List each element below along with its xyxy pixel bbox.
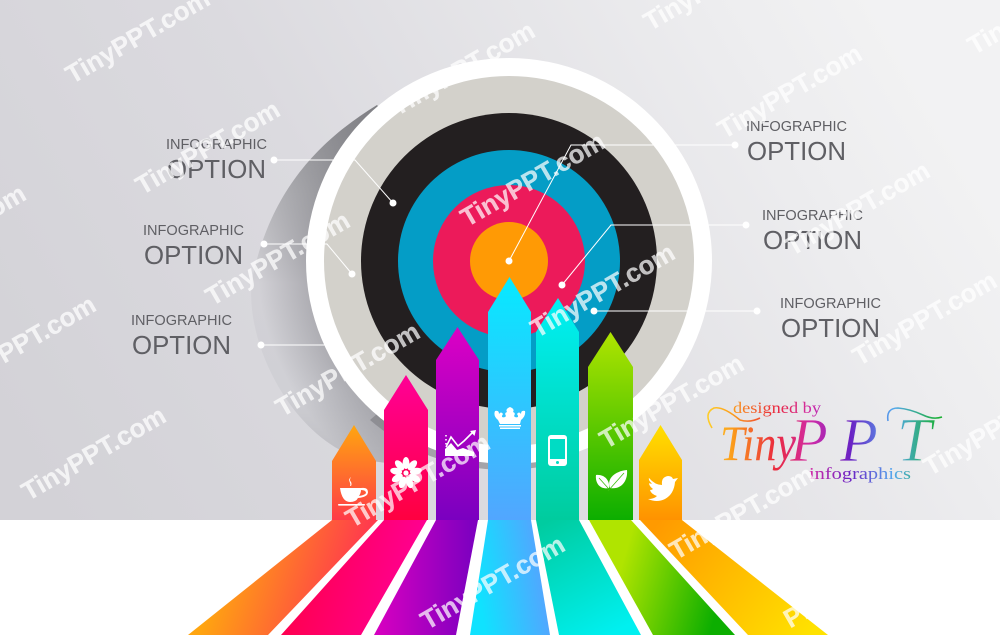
icon: crown — [494, 407, 525, 429]
icon: leaves — [596, 470, 627, 491]
watermarks: TinyPPT.com — [16, 400, 171, 507]
watermarks: TinyPPT.com — [594, 348, 749, 455]
option label middle right: INFOGRAPHIC — [762, 207, 863, 224]
watermarks: TinyPPT.com — [385, 15, 540, 122]
icon: coffee cup — [338, 477, 368, 506]
floor strips — [188, 520, 828, 635]
arrow 7 yellow with bird icon — [639, 425, 682, 520]
icon: flower — [390, 457, 422, 489]
option label middle left — [143, 222, 244, 270]
watermarks: TinyPPT.com — [455, 126, 610, 233]
target: concentric circles — [306, 58, 712, 464]
watermarks: TinyPPT.com — [664, 459, 819, 566]
watermarks: PPT — [778, 583, 837, 634]
watermarks: TinyPPT.com — [712, 38, 867, 145]
watermarks: TinyPPT.com — [130, 94, 285, 201]
option label top left: OPTION — [167, 154, 266, 184]
icon: line chart — [445, 430, 476, 456]
option label bottom left: OPTION — [132, 330, 231, 360]
option label middle right: OPTION — [763, 225, 862, 255]
brand logo: designed by TinyPPT infographics: designed by — [733, 400, 821, 417]
watermarks: TinyPPT.com — [86, 511, 241, 618]
watermarks: TinyPPT.com — [525, 237, 680, 344]
arrow 2 pink with flower icon — [384, 375, 428, 520]
target shadow — [251, 105, 545, 470]
option label top right: OPTION — [747, 136, 846, 166]
option leader lines and dots — [258, 142, 760, 348]
arrow 6 green with leaves icon — [588, 332, 633, 520]
watermarks: TinyPPT.com — [270, 316, 425, 423]
floor — [0, 520, 1000, 635]
option label middle left: OPTION — [144, 240, 243, 270]
arrow 1 orange with cup icon — [332, 425, 376, 520]
arrow 3 purple with chart icon — [436, 327, 479, 520]
option label top right: INFOGRAPHIC — [746, 118, 847, 135]
option label bottom right — [780, 295, 881, 343]
option label top left: INFOGRAPHIC — [166, 136, 267, 153]
watermarks: TinyPPT.com — [340, 427, 495, 534]
option label middle left: INFOGRAPHIC — [143, 222, 244, 239]
option label bottom left — [131, 312, 232, 360]
brand logo: designed by TinyPPT infographics: Tiny — [720, 415, 797, 471]
watermarks: TinyPPT.com — [780, 155, 935, 262]
option label bottom right: OPTION — [781, 313, 880, 343]
arrow 5 teal with phone icon — [536, 298, 579, 520]
watermarks: TinyPPT.com — [847, 265, 1000, 372]
arrow 4 blue with crown icon — [488, 277, 531, 520]
brand logo: designed by TinyPPT infographics: infographics — [809, 464, 911, 483]
watermarks: TinyPPT.com — [415, 529, 570, 635]
option label top right — [746, 118, 847, 166]
option label bottom right: INFOGRAPHIC — [780, 295, 881, 312]
watermarks: TinyPPT.com — [200, 205, 355, 312]
option label top left — [166, 136, 267, 184]
brand logo: designed by TinyPPT infographics: PPT — [789, 407, 936, 475]
brand logo: designed by TinyPPT infographics — [708, 400, 942, 483]
icon: twitter bird — [648, 476, 678, 501]
option label middle right — [762, 207, 863, 255]
icon: smartphone — [548, 435, 567, 466]
option label bottom left: INFOGRAPHIC — [131, 312, 232, 329]
